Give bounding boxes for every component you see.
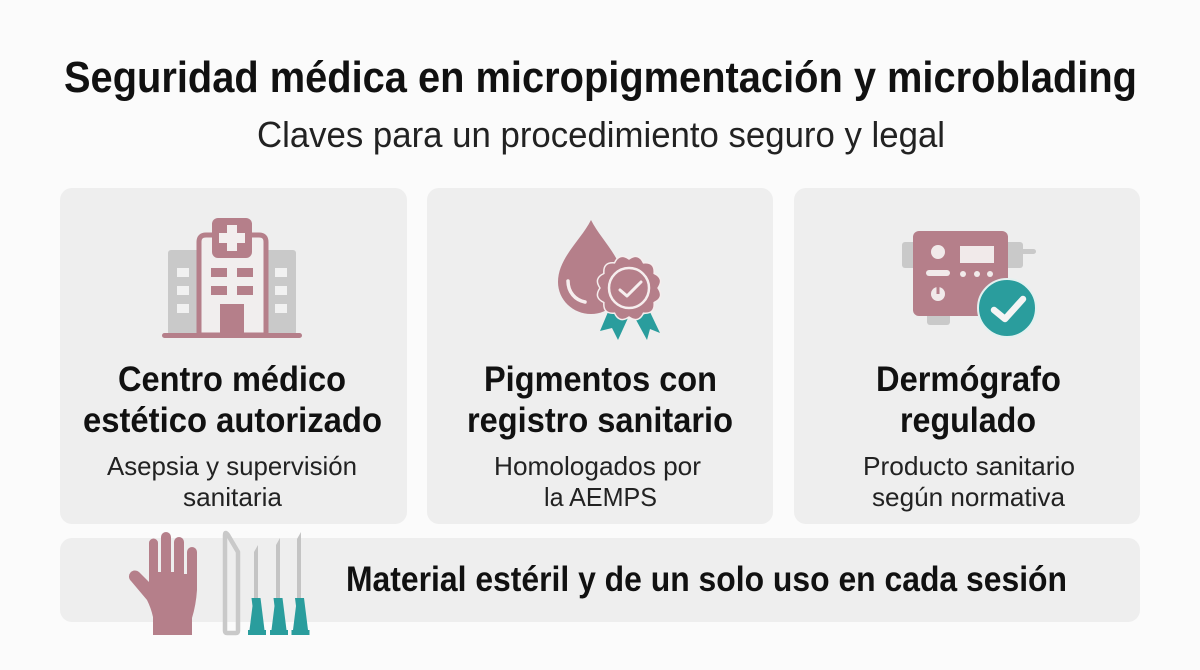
icon: hospital bbox=[162, 218, 302, 338]
text: asepsia: Asepsia y supervisión bbox=[107, 451, 357, 481]
text: material estéril: Material estéril y de un solo uso en cada sesión bbox=[346, 560, 1067, 599]
heading: centro médico: Centro médico bbox=[118, 360, 346, 399]
text: asepsia: sanitaria bbox=[183, 482, 283, 512]
heading: centro médico bbox=[83, 360, 382, 440]
icon: glove bbox=[129, 532, 197, 635]
text: producto sanitario: según normativa bbox=[872, 482, 1066, 512]
heading: centro médico: estético autorizado bbox=[83, 401, 382, 440]
heading: pigmentos: registro sanitario bbox=[467, 401, 733, 440]
icon: regulated device bbox=[902, 231, 1036, 337]
panel: centro médico bbox=[60, 188, 407, 524]
panel: pigmentos bbox=[427, 188, 773, 524]
panel: material estéril bbox=[60, 532, 1140, 635]
text: producto sanitario: Producto sanitario bbox=[863, 451, 1075, 481]
panel: dermógrafo bbox=[794, 188, 1140, 524]
heading: pigmentos bbox=[467, 360, 733, 440]
subtitle: Claves para un procedimiento seguro y legal bbox=[257, 114, 945, 155]
heading: pigmentos: Pigmentos con bbox=[484, 360, 717, 399]
icon: scalpel bbox=[225, 533, 238, 633]
heading: dermógrafo: Dermógrafo bbox=[876, 360, 1061, 399]
heading: dermógrafo: regulado bbox=[900, 401, 1036, 440]
text: producto sanitario bbox=[863, 451, 1075, 512]
text: asepsia bbox=[107, 451, 357, 512]
heading: dermógrafo bbox=[876, 360, 1061, 440]
icon: needles bbox=[248, 532, 310, 635]
text: homologados: Homologados por bbox=[494, 451, 701, 481]
text: homologados: la AEMPS bbox=[544, 482, 657, 512]
icon: drop with badge bbox=[558, 220, 661, 340]
text: homologados bbox=[494, 451, 701, 512]
